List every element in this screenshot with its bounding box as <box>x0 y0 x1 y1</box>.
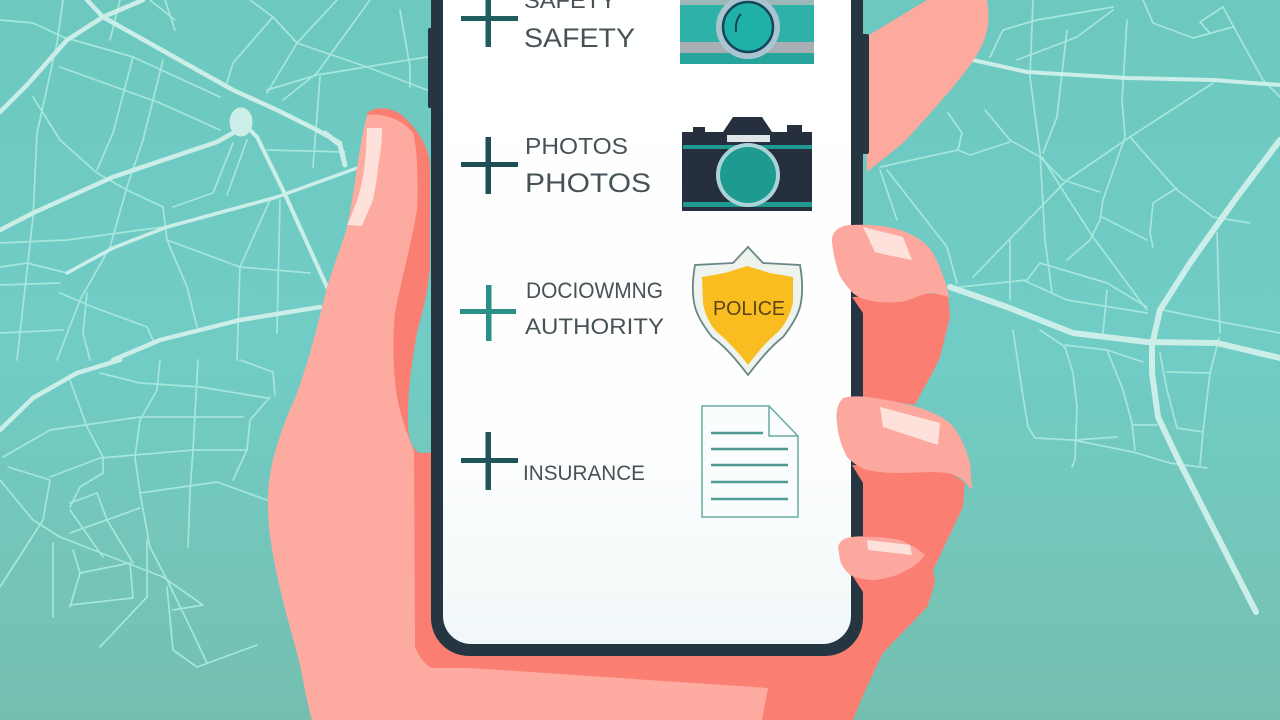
icon: police shield: POLICE <box>713 298 785 320</box>
finger: middle and lower shadow <box>852 465 965 610</box>
icon: plus <box>461 432 518 490</box>
label: authority: DOCIOWMNG <box>526 278 663 303</box>
label: photos <box>525 133 651 198</box>
icon: document <box>702 406 798 517</box>
checklist row: photos <box>461 117 812 211</box>
palm shadow <box>360 108 935 720</box>
icon: dark camera <box>682 117 812 211</box>
hand: palm and thumb <box>268 108 935 720</box>
label: photos: PHOTOS <box>525 168 651 198</box>
phone side buttons <box>428 28 869 154</box>
phone body <box>431 0 863 656</box>
label: safety <box>524 0 635 53</box>
finger: middle <box>836 396 972 490</box>
icon: plus <box>460 285 516 341</box>
checklist row: insurance <box>461 406 798 517</box>
icon: plus <box>461 137 518 194</box>
label: safety: SAFETY <box>524 23 635 53</box>
icon: police shield <box>693 247 802 375</box>
phone <box>428 0 869 656</box>
finger: upper <box>832 225 950 405</box>
label: insurance: INSURANCE <box>523 462 645 485</box>
label: authority: AUTHORITY <box>525 314 664 339</box>
icon: plus <box>461 0 518 47</box>
checklist row: authority <box>460 247 802 375</box>
finger: top behind the phone <box>864 0 988 172</box>
fingers over the phone <box>832 225 972 610</box>
icon: teal camera <box>680 0 814 64</box>
finger: lower <box>838 536 925 592</box>
label: authority <box>525 278 664 339</box>
palm <box>268 114 768 720</box>
label: photos: PHOTOS <box>525 133 628 159</box>
thumbnail highlight <box>347 128 382 226</box>
checklist row: safety <box>461 0 814 64</box>
phone screen <box>443 0 851 644</box>
